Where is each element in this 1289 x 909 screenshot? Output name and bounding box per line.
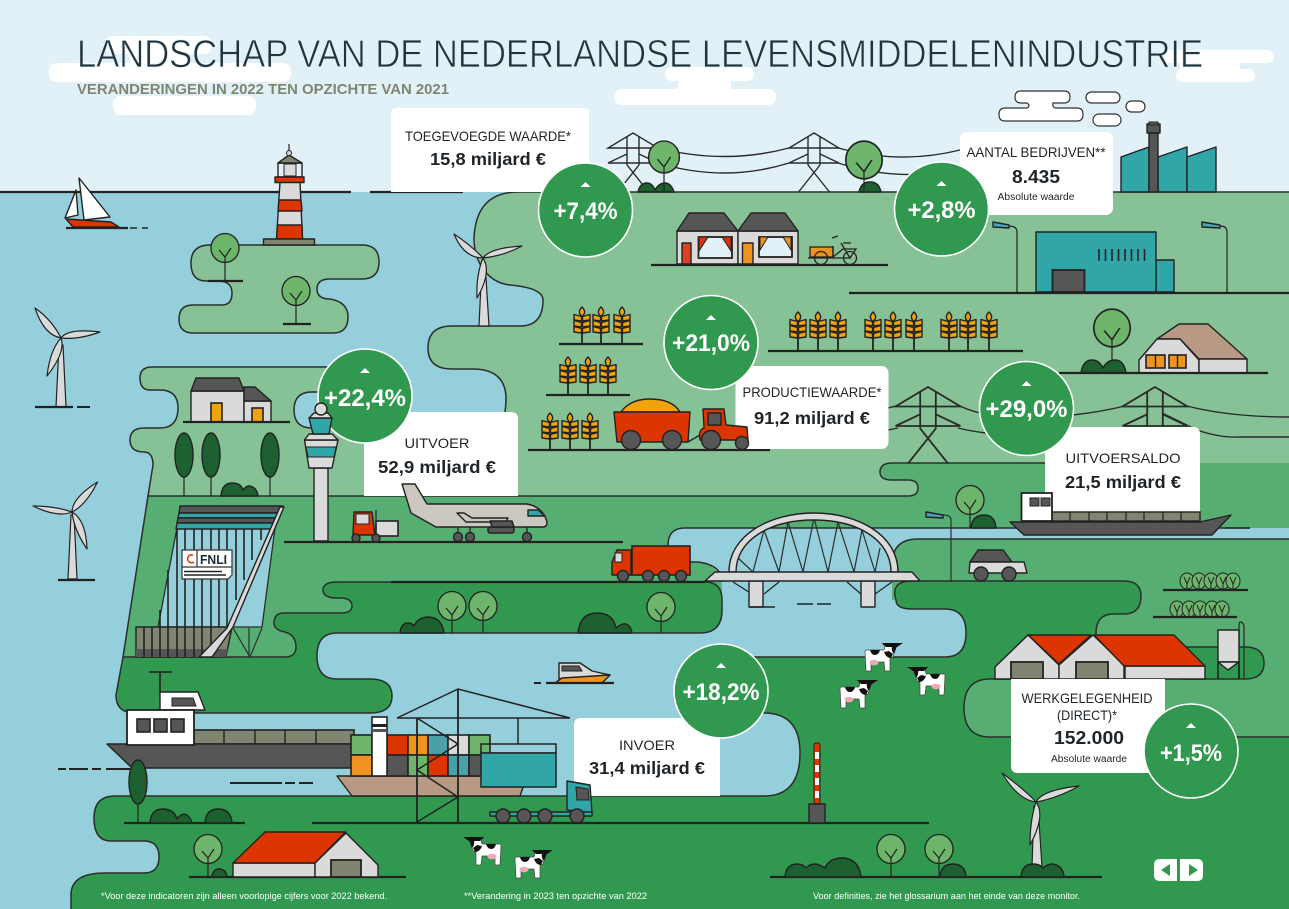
panel: werkgelegenheid	[1011, 679, 1165, 773]
water background	[0, 192, 1289, 909]
badge: toegevoegde waarde +7,4%: +7,4%	[554, 198, 618, 225]
ground line: airport	[284, 541, 623, 543]
panel: invoer: INVOER	[619, 737, 675, 753]
subtitle: VERANDERINGEN IN 2022 TEN OPZICHTE VAN 2021	[77, 81, 449, 98]
icon: beacon	[809, 743, 825, 823]
land: light green upper landscape	[130, 192, 1289, 500]
panel: aantal bedrijven	[960, 132, 1113, 215]
icon: wind turbine bottom right	[1002, 773, 1079, 867]
panel: uitvoer: 52,9 miljard €	[378, 457, 496, 477]
icon: FNLI headquarters	[136, 506, 284, 657]
icon: farmhouse with tree	[1059, 309, 1268, 373]
panel: werkgelegenheid: (DIRECT)*	[1057, 707, 1117, 723]
icon: street lamp by the road	[926, 512, 951, 582]
panel: productiewaarde	[736, 366, 888, 449]
sky background	[0, 0, 1289, 192]
badge: toegevoegde waarde +7,4%	[538, 163, 632, 257]
river bank line behind ship	[1225, 527, 1250, 529]
icon: sailboat	[65, 178, 148, 228]
badge: productiewaarde +21,0%	[664, 296, 758, 390]
icon: wind turbine left bottom	[33, 482, 98, 580]
panel: werkgelegenheid: Absolute waarde	[1051, 754, 1127, 765]
factory smoke clouds	[999, 91, 1145, 126]
icon: cypress and bushes at quay	[129, 760, 232, 823]
icon: wind turbine left top	[35, 308, 100, 407]
icon: inland barge	[58, 672, 354, 783]
panel: uitvoersaldo: 21,5 miljard €	[1065, 472, 1181, 492]
icon: container barge	[337, 717, 527, 796]
icon: teal factory hall	[849, 232, 1289, 293]
ground lines: lower quay	[124, 823, 1102, 877]
land: dark green farm lobe	[1180, 647, 1264, 679]
icon: arch bridge	[705, 513, 920, 607]
panel: productiewaarde: PRODUCTIEWAARDE*	[742, 384, 882, 400]
sign: FNLI: FNLI	[200, 553, 227, 567]
badge: aantal bedrijven +2,8%	[894, 162, 988, 256]
icon: cargo bike	[808, 236, 856, 264]
badge: uitvoer +22,4%	[318, 349, 412, 443]
panel: invoer	[574, 718, 720, 796]
icon: bushes and trees on the dike	[400, 592, 675, 633]
panel: productiewaarde: 91,2 miljard €	[754, 408, 870, 428]
white clouds	[49, 36, 1274, 115]
land: dark green lower landscape	[71, 581, 1289, 909]
badge: uitvoersaldo +29,0%	[980, 362, 1074, 456]
horizon line	[0, 191, 463, 193]
icon: bottom right bushes and trees	[785, 834, 1064, 877]
badge: invoer +18,2%	[674, 644, 768, 738]
land: mid green plain	[123, 463, 1289, 657]
icon: control tower	[304, 403, 338, 541]
panel: aantal bedrijven: 8.435	[1012, 167, 1060, 187]
badge: uitvoersaldo +29,0%: +29,0%	[986, 396, 1068, 423]
footnote: glossarium: Voor definities, zie het glossarium aan het einde van deze monitor.	[813, 891, 1080, 902]
badge: invoer +18,2%: +18,2%	[682, 679, 760, 706]
land: lighthouse island	[179, 245, 379, 333]
icon: power cables top	[658, 148, 960, 175]
panel: uitvoersaldo	[1045, 427, 1200, 522]
icon: lettuce rows	[1153, 573, 1248, 617]
icon: street lamps	[993, 222, 1227, 292]
icon: power cables lower	[888, 406, 1289, 437]
icon: pylon lower	[896, 387, 960, 464]
panel: toegevoegde waarde: 15,8 miljard €	[430, 149, 546, 169]
icon: tree on island 2	[282, 276, 311, 324]
footnote: verandering: **Verandering in 2023 ten opzichte van 2022	[464, 891, 647, 902]
icon: baggage truck	[352, 510, 398, 542]
icon: cargo ship on river	[1010, 493, 1231, 535]
icon: container truck	[490, 781, 592, 823]
land: dark green upper strip	[116, 582, 722, 713]
footnote: voorlopige cijfers: *Voor deze indicatoren zijn alleen voorlopige cijfers voor 2022 bekend.	[101, 891, 387, 902]
wheat rows	[528, 307, 1023, 450]
badge: werkgelegenheid +1,5%	[1144, 704, 1238, 798]
badge: productiewaarde +21,0%: +21,0%	[672, 330, 750, 357]
icon: cows by the barn	[463, 837, 553, 878]
panel: uitvoersaldo: UITVOERSALDO	[1066, 450, 1181, 466]
icon: red truck	[391, 546, 705, 582]
icon: pylon	[789, 133, 839, 192]
icon: cows meadow	[840, 643, 945, 708]
panel: toegevoegde waarde	[391, 108, 589, 192]
panel: invoer: 31,4 miljard €	[589, 758, 705, 778]
panel: werkgelegenheid: WERKGELEGENHEID	[1022, 690, 1152, 706]
icon: big farm with silo	[995, 622, 1244, 679]
icon: tree on island	[208, 234, 243, 281]
icon: house on left land	[183, 378, 290, 422]
icon: car	[969, 550, 1027, 581]
panel: werkgelegenheid: 152.000	[1054, 728, 1124, 748]
panel: uitvoer: UITVOER	[404, 435, 470, 451]
panel: toegevoegde waarde: TOEGEVOEGDE WAARDE*	[405, 128, 571, 144]
icon: factory with chimney	[1121, 122, 1216, 192]
badge: uitvoer +22,4%: +22,4%	[324, 385, 406, 412]
badge: werkgelegenheid +1,5%: +1,5%	[1160, 740, 1222, 767]
icon: trees and bushes behind pylons	[638, 141, 882, 192]
icon: wind turbine in the bay	[454, 234, 522, 326]
panel: aantal bedrijven: Absolute waarde	[998, 192, 1075, 203]
icon: tree and bush by the river	[956, 486, 996, 528]
icon: harbour crane	[397, 689, 570, 823]
badge: aantal bedrijven +2,8%: +2,8%	[908, 197, 976, 224]
icon: pylon	[608, 133, 658, 192]
icon: airplane	[402, 484, 547, 542]
panel: uitvoer	[364, 412, 518, 496]
icon: town houses	[651, 213, 888, 265]
icon: lighthouse	[264, 144, 314, 245]
icon: barn bottom left	[194, 832, 378, 877]
icon: speedboat	[534, 663, 614, 683]
icon: tractor with trailer	[614, 399, 748, 450]
navigation buttons	[1154, 859, 1203, 881]
icon: cypress trees and bushes	[175, 433, 279, 496]
icon: pylon lower right	[1122, 387, 1188, 464]
panel: aantal bedrijven: AANTAL BEDRIJVEN**	[966, 144, 1106, 160]
sign: FNLI	[182, 550, 232, 579]
